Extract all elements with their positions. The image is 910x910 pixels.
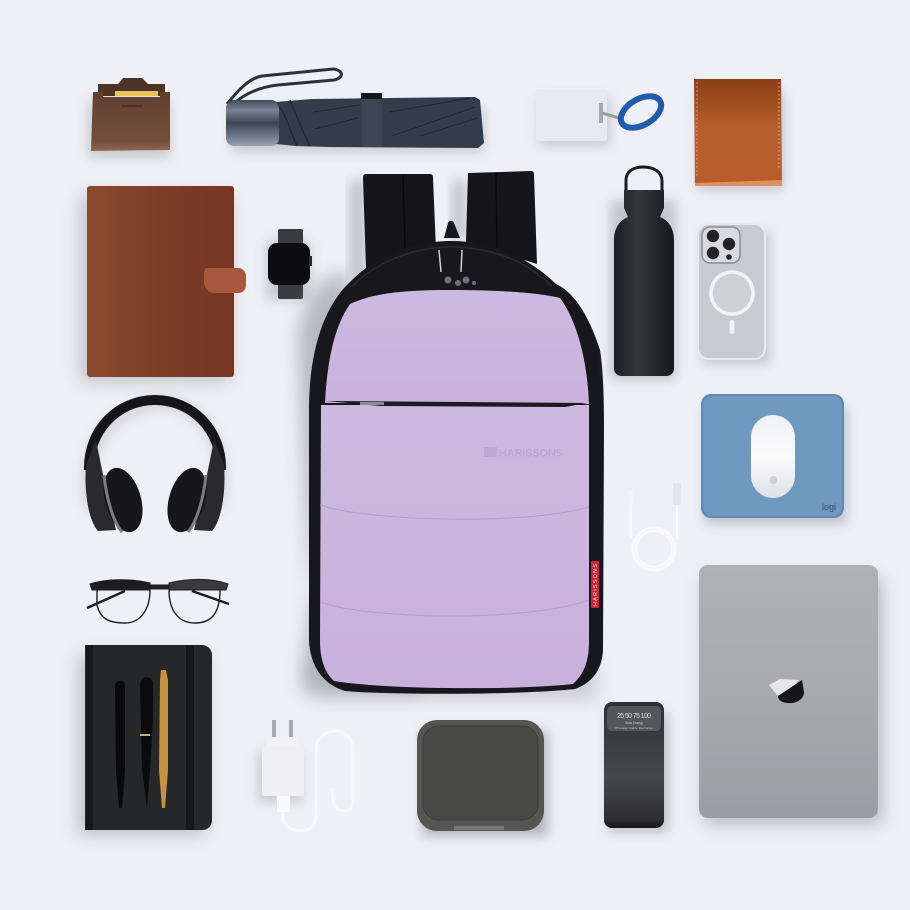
pen black and gold [140,677,153,808]
icon: black power bank [604,702,668,832]
planner strap [204,268,246,293]
icon: folded umbrella [226,69,484,152]
umbrella canopy [276,97,484,148]
umbrella handle [226,100,279,146]
icon: white charger with cable [258,720,353,831]
right arm and cup [161,440,224,537]
icon: eyeglasses [87,579,229,623]
icon: ID card with blue lanyard [536,89,667,146]
power bank display: Solar Energy [625,721,643,725]
red side tag [591,561,599,608]
pen black [115,681,125,808]
logi label: logi [822,502,836,512]
icon: grey lunch box [417,720,548,836]
icon: white USB cable [631,483,677,570]
headband [89,400,221,470]
icon: silver laptop [699,565,882,824]
icon: phone with clear case [698,224,770,364]
icon: black water bottle [610,167,676,380]
laptop logo [769,679,804,703]
pen gold [159,670,168,808]
red side tag: HARISSONS [593,564,599,606]
icon: small leather card wallet [88,78,170,158]
power bank display: Wireless Cable Recharge [615,726,653,730]
bottle body [614,190,674,376]
magsafe ring [711,272,753,314]
top pull tab [444,221,460,238]
icon: smart watch [266,229,312,300]
left shoulder strap [363,174,436,268]
umbrella band [362,98,382,147]
icon: black notebook with pens [78,645,212,835]
panel: backpack [298,171,604,700]
zipper pulls [439,250,462,272]
left arm and cup [86,440,149,537]
lilac top panel [325,290,589,404]
white mouse [751,415,795,498]
backpack body [309,241,604,694]
power bank display [607,706,661,731]
padded seams [320,505,589,519]
front zip [326,401,587,407]
umbrella strap [227,69,341,105]
right shoulder strap [466,171,537,264]
camera lenses [707,230,735,260]
icon: black headphones [86,400,224,537]
icon: orange leather wallet [694,79,784,190]
lanyard loop [615,90,667,134]
power bank display: 25 50 75 100 [617,713,651,720]
bottle handle [626,167,662,190]
lilac lower panel [320,405,589,688]
brand mark: HARISSONS [499,448,563,460]
icon: blue mouse pad [701,394,847,524]
icon: brown leather planner [80,186,246,382]
